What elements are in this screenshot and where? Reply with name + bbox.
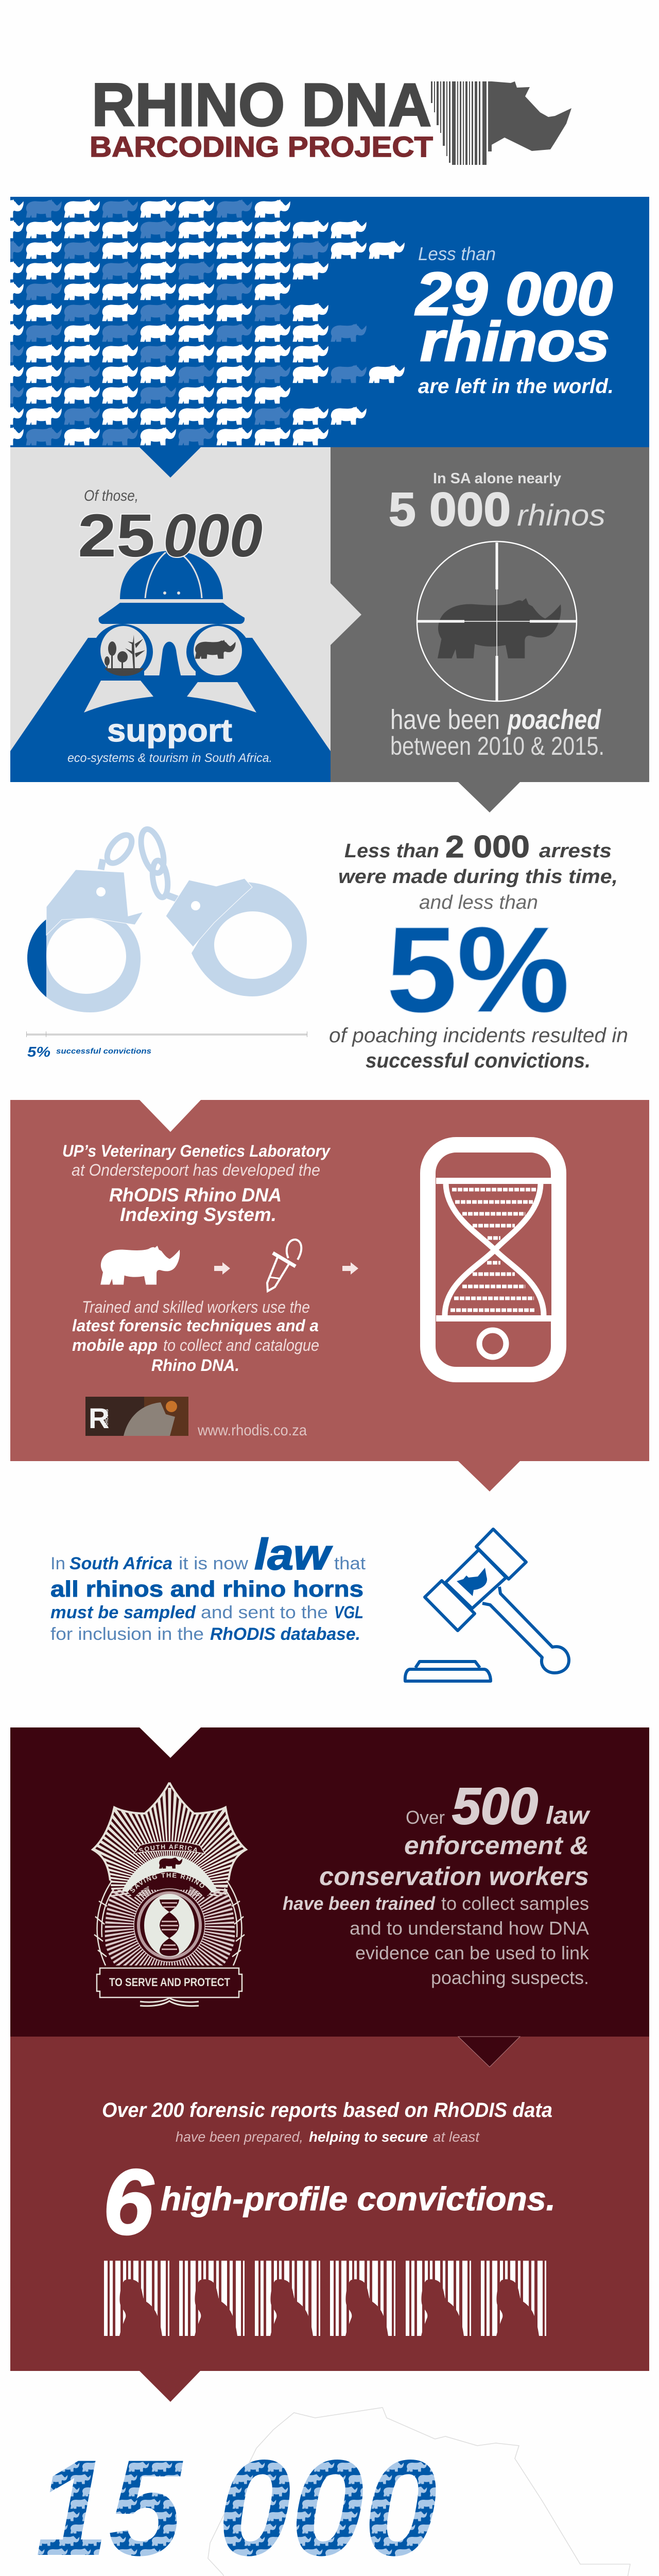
DNA oval (134, 1889, 205, 1962)
icon: handcuffs with 5 percent shaded (27, 826, 307, 1012)
panel: less than 29 000 rhinos (0, 197, 649, 447)
text: trained and skilled workers: Trained and skilled workers use the (82, 1298, 310, 1316)
text: must be sampled and sent to the VGL: VGL (334, 1603, 363, 1622)
text: less than 2 000 arrests (344, 829, 612, 864)
text: in SA alone nearly: In SA alone nearly (433, 470, 561, 487)
text: have been poached: have been (390, 704, 500, 735)
text: high-profile convictions: high-profile convictions. (161, 2180, 556, 2217)
text: conservation workers: conservation workers (319, 1862, 589, 1891)
hat brim (98, 603, 245, 624)
icon: white rhino (100, 1246, 180, 1285)
text: over 500 law: Over (406, 1807, 445, 1828)
left cuff lock (46, 870, 143, 935)
panel: forensic reports and convictions (10, 2037, 649, 2402)
text: UP's Veterinary Genetics Laboratory: UP’s Veterinary Genetics Laboratory (62, 1142, 331, 1160)
text: successful convictions: successful convictions. (366, 1049, 591, 1072)
binocular left (92, 624, 153, 680)
text: over 500 law (406, 1777, 591, 1835)
text: and less than: and less than (419, 892, 538, 913)
panel: 500 law enforcement workers (10, 1727, 649, 2037)
text: must be sampled and sent to the VGL: must be sampled (50, 1603, 196, 1622)
ribbon tails (140, 1997, 199, 2006)
scale bar (26, 1031, 307, 1037)
panel: arrests and convictions (26, 826, 628, 1072)
left cuff ring (27, 907, 141, 1012)
right arm (187, 682, 256, 713)
text: have been poached: poached (507, 704, 601, 735)
helix rhino rows (450, 1190, 536, 1310)
text: less than: Less than (418, 243, 496, 264)
icon: gavel with rhino (405, 1529, 569, 1681)
text: training description (350, 1918, 589, 1988)
text: over 500 law: 500 (452, 1777, 538, 1835)
phone body (428, 1145, 559, 1375)
text: RhODIS Rhino DNA: RhODIS Rhino DNA (109, 1184, 282, 1206)
text: of poaching incidents resulted in: of poaching incidents resulted in (329, 1024, 628, 1047)
text: have been trained: to collect samples (441, 1893, 589, 1914)
binocular right (186, 624, 250, 680)
crown rays (110, 1826, 229, 1945)
text: mobile app to collect: mobile app (72, 1336, 158, 1354)
text: for inclusion in the RhODIS database: RhODIS database. (210, 1624, 360, 1644)
text: In South Africa it is now law that: South Africa (70, 1554, 172, 1573)
box: to serve and protect (97, 1968, 242, 1997)
logo: RhODIS: R (89, 1402, 109, 1434)
text: helping to secure: at least (433, 2129, 480, 2145)
rhino herd pictogram (0, 199, 405, 445)
logo: RhODIS (85, 1397, 188, 1436)
box: to serve and protect: TO SERVE AND PROTECT (109, 1976, 230, 1989)
icon: rhino in right lens (195, 640, 236, 659)
big number: 29 000: 29 000 (415, 260, 613, 328)
left arm (84, 681, 153, 713)
icon: phone with DNA helix (428, 1145, 559, 1375)
text: Rhino DNA: Rhino DNA. (151, 1356, 239, 1375)
laurel (94, 1880, 245, 1965)
arrow: to next section (458, 782, 520, 812)
arrow: from dark panel (458, 2037, 520, 2067)
arrow: rhino to pipette (214, 1262, 230, 1275)
text: Indexing System: Indexing System. (120, 1204, 276, 1225)
text: less than 2 000 arrests: Less than (344, 840, 439, 862)
text: helping to secure: have been prepared, (176, 2129, 303, 2145)
panel: rhino DNA law (50, 1529, 569, 1681)
ranger body (10, 638, 331, 782)
small rhino (159, 1857, 182, 1869)
hat rivets (163, 591, 180, 595)
icon: sample pipette (267, 1240, 301, 1291)
icon: rhino head silhouette (492, 81, 571, 151)
text: support: support (107, 713, 232, 749)
icon: trees in left lens (105, 635, 145, 676)
text: less than 2 000 arrests: arrests (539, 840, 612, 862)
icon: rhino in crosshair (417, 541, 577, 701)
grey gap between binoculars (144, 624, 196, 675)
emblem: saving the rhino badge: SOUTH AFRICA (139, 1844, 197, 1853)
title line: RHINO DNA: RHINO DNA (92, 71, 431, 139)
text: training description: poaching suspects. (431, 1967, 589, 1988)
chain links (101, 826, 178, 899)
arrow: light notch (331, 583, 361, 645)
lower rays (126, 1882, 213, 1970)
panel: RhODIS indexing system (10, 1100, 649, 1492)
text: for inclusion in the RhODIS database (50, 1624, 360, 1644)
hat dome (120, 551, 223, 599)
text: helping to secure (176, 2129, 480, 2145)
right cuff ring (192, 882, 307, 996)
emblem: saving the rhino badge (91, 1782, 248, 2007)
text: mobile app to collect: to collect and catalogue (163, 1336, 319, 1354)
text: latest forensic techniques: latest forensic techniques and a (72, 1316, 319, 1335)
left cuff blue share (27, 919, 46, 997)
logo: RhODIS: RHODIS (104, 1409, 109, 1427)
text: have been poached (390, 704, 601, 735)
legend: 5 percent successful convictions: successful convictions (56, 1047, 151, 1056)
text: over 500 law: law (546, 1802, 591, 1829)
text: helping to secure: helping to secure (309, 2129, 428, 2145)
home button (479, 1330, 506, 1357)
text: at Onderstepoort: at Onderstepoort has developed the (72, 1161, 320, 1179)
panel: 15 000 rhinos indexed (32, 2408, 630, 2576)
text: mobile app to collect (72, 1336, 319, 1354)
text: were made during this time: were made during this time, (338, 866, 618, 888)
emblem: saving the rhino badge: SAVING THE RHINO (130, 1873, 204, 1893)
icon: barcode bars (431, 81, 492, 165)
DNA helix (160, 1900, 179, 1956)
big number: 25 000: 25 (78, 502, 155, 570)
text: eco-systems and tourism: eco-systems & tourism in South Africa. (67, 751, 272, 765)
hat seams (145, 552, 202, 598)
text: of those: Of those, (84, 487, 138, 504)
text: rhinos: rhinos (420, 310, 610, 372)
banner: saving the rhino (128, 1873, 211, 1898)
text: enforcement: enforcement & (404, 1831, 589, 1860)
text: In South Africa it is now law that (50, 1530, 366, 1579)
panel: 5 000 rhinos poached (331, 447, 649, 812)
text: website url: www.rhodis.co.za (197, 1422, 307, 1439)
arrow: from rhino panel (140, 447, 201, 478)
text: for inclusion in the RhODIS database: for inclusion in the (50, 1624, 204, 1644)
screen side gaps (436, 1184, 441, 1315)
icon: ranger with binoculars (10, 551, 331, 782)
text: all rhinos and rhino horns: all rhinos and rhino horns (50, 1577, 363, 1602)
text: are left in the world: are left in the world. (418, 375, 614, 398)
text: In South Africa it is now law that: it is now (179, 1554, 248, 1573)
big number: 5 000: 5 000 (389, 483, 511, 536)
text: training description: evidence can be used to link (355, 1942, 589, 1963)
white arch (122, 1856, 218, 1895)
ribbon: south africa (134, 1841, 205, 1854)
big number: 25 000: 000 (163, 502, 263, 570)
text: rhinos: rhinos (517, 499, 605, 532)
text: training description: and to understand how DNA (350, 1918, 589, 1939)
subtitle line: BARCODING PROJECT: BARCODING PROJECT (90, 130, 433, 163)
text: less than 2 000 arrests: 2 000 (445, 829, 530, 864)
legend: 5 percent successful convictions (27, 1044, 151, 1060)
text: must be sampled and sent to the VGL: and sent to the (201, 1603, 328, 1622)
crown outline (93, 1783, 246, 1880)
arrow: pipette to phone (342, 1262, 358, 1275)
title: Rhino DNA Barcoding Project (90, 71, 571, 165)
text: In South Africa it is now law that: that (334, 1554, 366, 1573)
right cuff lock (166, 878, 252, 947)
text: between 2010 and 2015: between 2010 & 2015. (390, 732, 604, 760)
text: rhinos in 9 African (33, 2569, 436, 2576)
legend: 5 percent successful convictions: 5% (27, 1044, 50, 1060)
big number: 25 000 (78, 502, 263, 570)
panel: 25 000 support eco-systems (10, 447, 331, 782)
text: must be sampled and sent to the VGL (50, 1603, 363, 1622)
map: Africa outline (208, 2408, 630, 2576)
text: In South Africa it is now law that: law (254, 1530, 333, 1579)
big number: 6: 6 (103, 2150, 154, 2254)
big number: 5 percent: 5% (387, 902, 569, 1037)
text: have been trained (283, 1893, 589, 1914)
text: over 200 forensic reports: Over 200 forensic reports based on RhODIS data (102, 2099, 552, 2122)
nose (154, 642, 187, 697)
text: have been trained: have been trained (283, 1893, 436, 1914)
helix strands (445, 1184, 544, 1315)
icon: six suspects behind barcode bars (104, 2261, 546, 2336)
text: In South Africa it is now law that: In (50, 1554, 65, 1573)
